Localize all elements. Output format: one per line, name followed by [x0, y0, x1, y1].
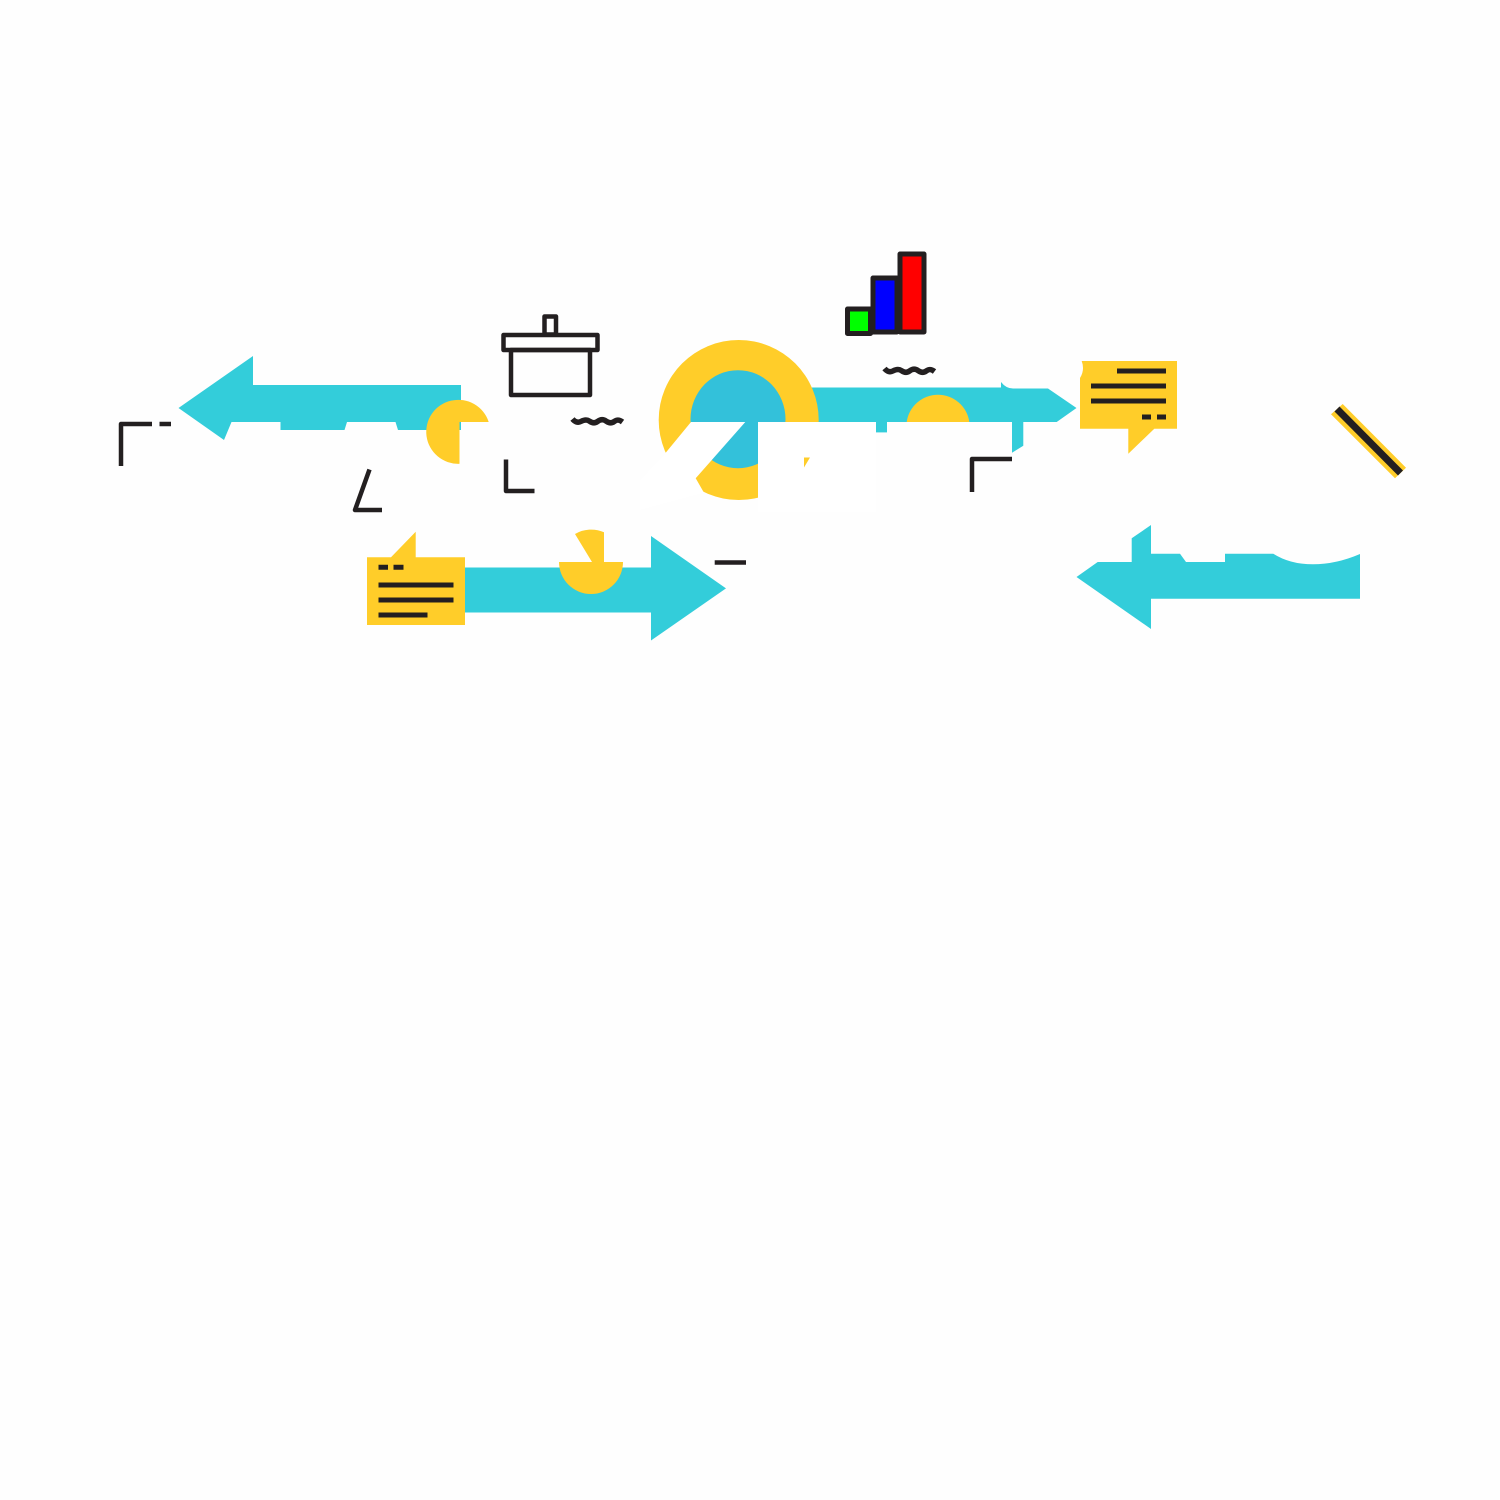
donut chart [640, 340, 876, 512]
icon: box with lid and handle [504, 316, 598, 395]
bubble text lines [378, 567, 454, 615]
sliver: yellow fragment [804, 458, 810, 468]
icon: yellow pie cut-out on left arrow [426, 400, 489, 464]
bar: green [848, 309, 870, 334]
yellow band [1331, 404, 1406, 478]
bracket: lower corner beside box [506, 460, 534, 491]
speech bubble: lower left [367, 532, 465, 625]
box lid [504, 335, 598, 350]
bracket: slanted corner [355, 470, 382, 510]
squiggle: below box [572, 419, 622, 423]
icon: yellow pie on lower arrow [559, 530, 623, 594]
bar: blue [873, 278, 897, 332]
bubble text lines [1091, 371, 1166, 417]
arrow stub below right arrow [876, 422, 887, 432]
box body [511, 350, 590, 395]
arrow: lower right pointing left [1076, 525, 1360, 629]
squiggle: below bar chart [884, 368, 934, 372]
icon: yellow half circle on right arrow [907, 395, 969, 422]
dash: top left [160, 422, 171, 426]
dash: beside lower arrow tip [715, 560, 746, 565]
black centre line [1337, 409, 1400, 473]
bar chart icon [848, 254, 924, 334]
bubble body and tail [367, 532, 465, 625]
box handle [544, 316, 556, 334]
arrow: upper left pointing left [178, 356, 461, 440]
diagonal bar: far right [1331, 404, 1406, 478]
speech bubble: upper right [1080, 361, 1177, 454]
arrow: upper right pointing right [800, 382, 1076, 453]
bubble body and tail [1080, 361, 1177, 454]
donut inner disc [690, 370, 786, 468]
arrow: lower left pointing right [465, 536, 726, 640]
bracket: below right arrow [972, 459, 1012, 492]
bar: red [900, 254, 924, 332]
donut outer ring [659, 340, 819, 500]
bracket: top left corner [121, 424, 152, 466]
